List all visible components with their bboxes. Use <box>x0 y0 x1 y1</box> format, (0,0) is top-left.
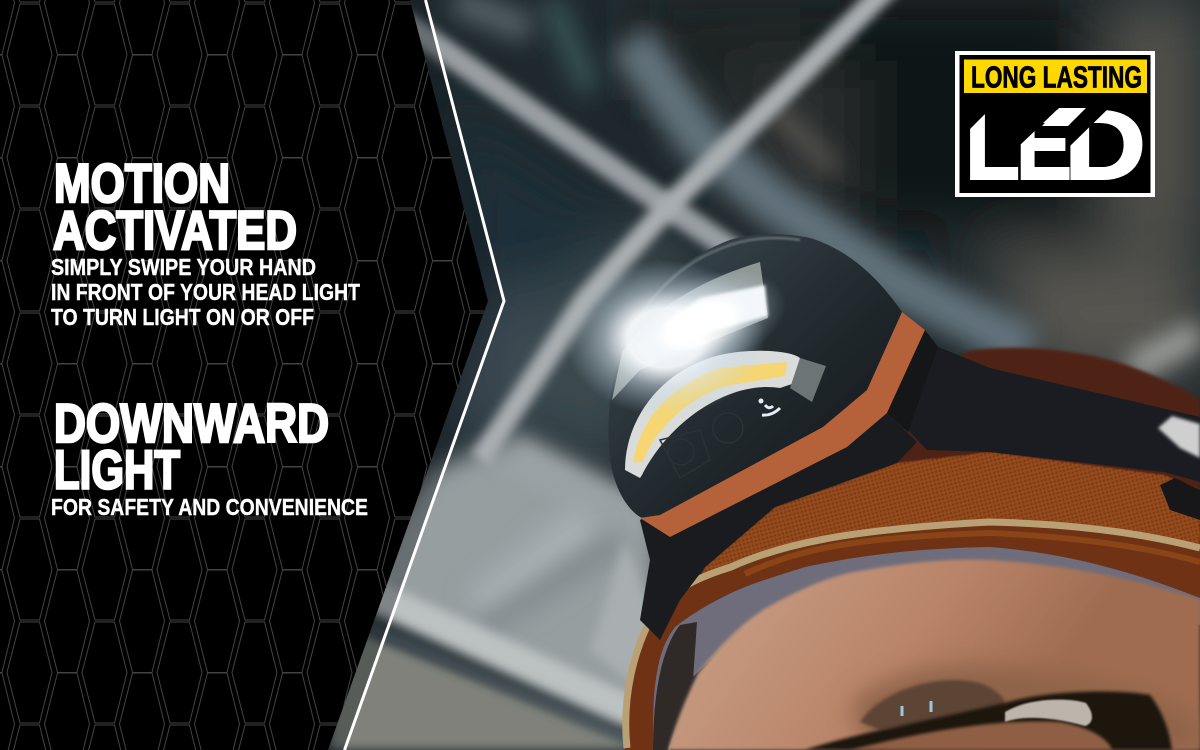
text block: motion activated description: TO TURN LIGHT ON OR OFF <box>51 304 314 330</box>
text block: downward light description: FOR SAFETY AND CONVENIENCE <box>51 494 368 520</box>
eye shadow <box>805 692 1172 750</box>
heading: motion activated <box>53 152 297 261</box>
heading: downward light: LIGHT <box>54 438 180 500</box>
bottom floor area <box>328 632 625 750</box>
brow shading <box>850 666 1200 750</box>
ceiling bar two <box>480 0 905 460</box>
lower lens housing <box>625 351 800 478</box>
white chevron line <box>344 0 504 750</box>
motion sensor icon <box>758 398 780 415</box>
badge banner text: LONG LASTING <box>971 60 1142 94</box>
main glow <box>565 260 765 416</box>
helmet and head <box>624 347 1200 750</box>
badge LED letters: E <box>1016 90 1072 200</box>
forehead <box>668 560 1200 750</box>
dark inner brim <box>624 522 1200 750</box>
headlamp <box>565 234 938 640</box>
eyebrow <box>860 680 1005 730</box>
heading: motion activated: ACTIVATED <box>53 199 297 261</box>
text block: motion activated description: IN FRONT OF YOUR HEAD LIGHT <box>51 279 361 305</box>
orange woven shell <box>701 452 1200 574</box>
beige rim <box>626 522 1200 748</box>
black strap <box>908 347 1200 482</box>
badge LED letters <box>965 90 1146 200</box>
inner dark shadow <box>653 622 697 750</box>
grey lens end block <box>790 358 826 402</box>
text block: motion activated description: SIMPLY SWIPE YOUR HAND <box>51 254 316 280</box>
side flare <box>629 274 782 368</box>
upper LED bright strip <box>688 283 770 330</box>
ceiling bar one <box>400 20 740 255</box>
skin under the glasses <box>850 721 1112 750</box>
badge LED letters: L <box>965 90 1020 200</box>
mount trim and neck <box>640 413 917 640</box>
lamp body highlight rim <box>650 236 800 302</box>
mode buttons <box>660 413 743 478</box>
heading: motion activated: MOTION <box>54 152 230 214</box>
badge yellow banner <box>964 60 1147 93</box>
blurred lower panels <box>510 445 655 520</box>
badge: long lasting LED <box>955 51 1155 200</box>
panel: black chevron with hex pattern <box>0 0 505 750</box>
heading: downward light: DOWNWARD <box>54 392 329 454</box>
blurred lower panel mass <box>340 440 660 725</box>
translucent chevron band <box>328 0 505 750</box>
top streaks <box>550 0 590 90</box>
lamp body <box>608 234 902 518</box>
amber LED strip <box>633 362 787 462</box>
upper lens housing <box>612 262 768 400</box>
strap logo <box>1158 416 1200 458</box>
orange band <box>640 312 925 537</box>
photo background: blurred ceiling grid <box>328 0 1200 750</box>
heading: downward light <box>54 392 329 500</box>
black collar <box>887 330 938 432</box>
brown blurred arc <box>770 105 835 170</box>
buckle <box>1160 478 1200 520</box>
badge LED letters: D <box>1064 90 1146 200</box>
blue-grey blurred duct <box>630 40 1030 350</box>
helmet dome <box>848 346 1200 559</box>
grey liner <box>653 547 1200 750</box>
text block: motion activated description <box>51 254 361 330</box>
glasses highlight <box>1005 700 1092 726</box>
